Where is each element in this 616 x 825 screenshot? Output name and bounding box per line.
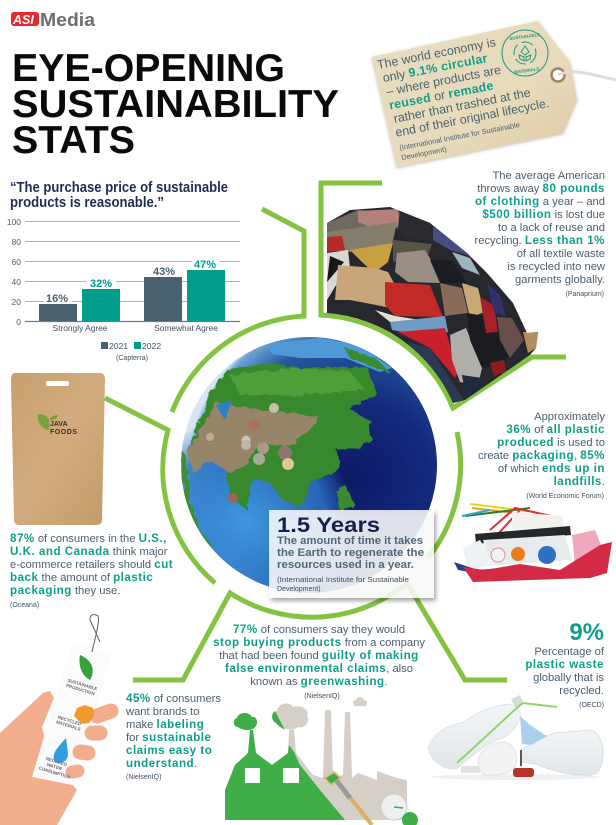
tag text: (International Institute for Sustainable <box>399 120 520 152</box>
clothing text: of all textile waste <box>517 248 605 260</box>
rocks <box>206 403 294 503</box>
image: kraft pouch <box>11 373 105 525</box>
tag text: reused or remade <box>388 78 495 112</box>
greenwashing text <box>213 623 425 700</box>
bar chart <box>7 217 240 362</box>
paint cup <box>381 794 418 825</box>
plastic packaging text <box>478 411 605 500</box>
labeling text: make labeling <box>126 718 204 731</box>
legend: 2021 <box>109 341 128 351</box>
plastic packaging text: 36% of all plastic <box>506 423 605 436</box>
info box: 1.5 years: 1.5 Years <box>277 514 380 537</box>
greenwashing text: stop buying products from a company <box>213 636 425 649</box>
bar chart: 60 <box>12 257 21 267</box>
label icons: PRODUCTION <box>66 683 95 696</box>
labeling text: (NielsenIQ) <box>126 774 161 781</box>
packaging text: U.K. and Canada think major <box>10 545 168 558</box>
bar chart: Strongly Agree <box>53 323 108 333</box>
clothing text: The average American <box>492 170 605 182</box>
logo: Media <box>40 10 96 30</box>
greenwashing text: false environmental claims, also <box>225 662 413 675</box>
packaging text: back the amount of plastic <box>10 571 153 584</box>
image: plastic bottles <box>428 695 603 780</box>
plastic packaging text: landfills. <box>554 475 605 488</box>
label icons: WATER <box>46 762 63 771</box>
plastic packaging text: Approximately <box>534 411 605 423</box>
nine percent text: globally that is <box>533 672 604 684</box>
image: earth globe <box>181 337 437 593</box>
title <box>12 47 339 162</box>
packaging text <box>10 532 173 609</box>
labeling text <box>125 692 221 781</box>
greenwashing text: (NielsenIQ) <box>304 693 340 700</box>
tag text: end of their original lifecycle. <box>394 96 550 140</box>
packaging text: e-commerce retailers should cut <box>10 558 173 571</box>
image: painted factory <box>225 697 418 825</box>
clothing text: is recycled into new <box>507 261 606 273</box>
clothing text: to a lack of reuse and <box>498 222 605 234</box>
info box: 1.5 years <box>269 510 434 598</box>
stamp: sustainable materials <box>502 30 548 76</box>
tag text: Development) <box>400 144 447 162</box>
tag text: only 9.1% circular <box>382 51 489 85</box>
clothing text: of clothing a year – and <box>475 195 605 208</box>
clothing text: (Panaprium) <box>565 291 604 298</box>
nine percent text <box>525 619 605 709</box>
clothing text: garments globally. <box>515 274 605 286</box>
title: STATS <box>12 119 135 162</box>
image: hand holding eco label <box>0 615 112 825</box>
info box: 1.5 years: resources used in a year. <box>277 559 414 571</box>
greenwashing text: that had been found guilty of making <box>219 649 419 662</box>
tag text: The world economy is <box>376 35 497 72</box>
bar chart: 40 <box>12 277 21 287</box>
labeling text: claims easy to <box>126 744 212 757</box>
bar chart: 80 <box>12 237 21 247</box>
image: clothing pile <box>327 207 538 403</box>
clothing text: $500 billion is lost due <box>482 208 605 221</box>
label icons: MATERIALS <box>56 719 81 732</box>
plastic packaging text: (World Economic Forum) <box>526 493 604 500</box>
green ring and connectors <box>105 183 566 680</box>
label icons: SUSTAINABLE <box>67 678 98 691</box>
image: plastic waste pile <box>454 504 612 582</box>
packaging text: (Oceana) <box>10 602 39 609</box>
labeling text: want brands to <box>125 706 199 718</box>
plastic packaging text: of which ends up in <box>498 462 605 475</box>
label icons: RECYCLED <box>57 715 82 726</box>
stamp: sustainable materials: SUSTAINABLE <box>509 32 541 41</box>
bar chart: Somewhat Agree <box>154 323 218 333</box>
bar chart: (Capterra) <box>116 355 148 362</box>
clothing text: throws away 80 pounds <box>477 182 605 195</box>
bar chart: 20 <box>12 297 21 307</box>
paint brush <box>324 772 372 825</box>
tag text: rather than trashed at the <box>392 85 532 126</box>
chart heading <box>10 180 228 211</box>
tag text: – where products are <box>385 63 502 99</box>
title: EYE-OPENING <box>12 47 285 90</box>
legend: 2022 <box>142 341 161 351</box>
title: SUSTAINABILITY <box>12 83 339 126</box>
bar chart: 100 <box>7 217 21 227</box>
nine percent text: plastic waste <box>525 658 604 671</box>
tag text <box>376 27 555 163</box>
bar chart: 47% <box>194 259 216 271</box>
clothing text <box>475 170 606 298</box>
logo <box>11 10 96 30</box>
nine percent text: Percentage of <box>534 646 605 658</box>
bar chart: 0 <box>16 317 21 327</box>
labeling text: 45% of consumers <box>126 692 221 705</box>
plastic packaging text: produced is used to <box>497 436 605 449</box>
fingers <box>72 711 111 772</box>
greenwashing text: 77% of consumers say they would <box>233 623 405 636</box>
nine percent text: 9% <box>569 619 604 646</box>
greenwashing text: known as greenwashing. <box>250 675 388 688</box>
plastic packaging text: create packaging, 85% <box>478 449 605 462</box>
label icons: CONSUMPTION <box>38 765 71 780</box>
nine percent text: recycled. <box>559 685 604 697</box>
bar chart: 16% <box>46 293 68 305</box>
clouds <box>234 697 367 730</box>
info box: 1.5 years: (International Institute for Sustainable <box>277 577 409 584</box>
info box: 1.5 years: the Earth to regenerate the <box>277 547 424 559</box>
labeling text: understand. <box>126 757 197 770</box>
bar chart: 32% <box>90 278 112 290</box>
clothing text: recycling. Less than 1% <box>475 234 605 247</box>
image: kraft pouch: FOODS <box>50 429 77 436</box>
info box: 1.5 years: Development) <box>277 586 321 593</box>
hang tag callout <box>372 21 616 167</box>
packaging text: 87% of consumers in the U.S., <box>10 532 167 545</box>
chart heading: “The purchase price of sustainable <box>10 180 228 196</box>
bar chart: 43% <box>153 266 175 278</box>
legend <box>101 341 161 351</box>
nine percent text: (OECD) <box>579 702 604 709</box>
labeling text: for sustainable <box>126 731 212 744</box>
logo: ASI <box>12 13 34 27</box>
packaging text: packaging they use. <box>10 584 120 597</box>
label icons: REDUCED <box>45 756 68 767</box>
stamp: sustainable materials: MATERIALS <box>514 66 540 75</box>
info box: 1.5 years: The amount of time it takes <box>277 535 423 547</box>
label icons <box>38 655 98 780</box>
image: kraft pouch: JAVA <box>50 421 68 428</box>
chart heading: products is reasonable.” <box>10 195 164 211</box>
